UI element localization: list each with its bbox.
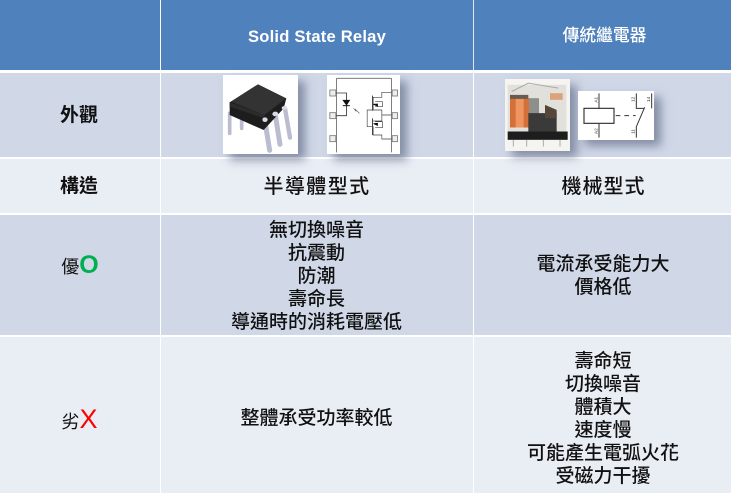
image: relay circuit diagram: 14 (646, 96, 651, 102)
image: relay circuit diagram: A1 (593, 97, 598, 103)
image: optocoupler chip (223, 75, 298, 154)
text: relay disadvantages: 受磁力干擾 (555, 466, 650, 486)
text: relay disadvantages: 切換噪音 (565, 374, 641, 394)
column divider (160, 73, 161, 493)
text: relay disadvantages: 速度慢 (574, 420, 632, 440)
text: relay disadvantages: 體積大 (574, 396, 632, 418)
label: appearance: 外觀 (60, 105, 98, 126)
image: SSR circuit diagram (327, 75, 400, 154)
text: SSR advantages (231, 220, 402, 333)
text: SSR advantages: 壽命長 (288, 289, 345, 310)
text: relay disadvantages: 壽命短 (574, 350, 632, 372)
header: traditional relay: 傳統繼電器 (563, 26, 646, 45)
row: advantages (0, 215, 731, 335)
image: relay circuit diagram: 12 (631, 96, 636, 102)
image: electromechanical relay (505, 79, 570, 151)
text: relay disadvantages (527, 350, 679, 486)
header column divider (160, 0, 161, 70)
text: SSR structure: 半導體型式 (264, 176, 370, 198)
text: SSR advantages: 抗震動 (288, 243, 345, 264)
header row (0, 0, 731, 70)
text: relay structure: 機械型式 (562, 176, 646, 198)
label: structure: 構造 (60, 176, 98, 197)
text: relay disadvantages: 可能產生電弧火花 (527, 442, 679, 464)
label: disadvantages: 劣X (61, 404, 98, 434)
text: SSR disadvantages: 整體承受功率較低 (240, 408, 392, 429)
text: SSR advantages: 防潮 (297, 266, 336, 287)
row: structure (0, 159, 731, 213)
column divider (473, 73, 474, 493)
image: relay circuit diagram: A2 (593, 128, 598, 134)
header column divider (473, 0, 474, 70)
row: appearance (0, 73, 731, 157)
image: relay circuit diagram: 11 (631, 129, 636, 134)
text: SSR advantages: 無切換噪音 (269, 220, 364, 241)
header: Solid State Relay: Solid State Relay (248, 26, 386, 46)
text: relay advantages (536, 254, 670, 298)
text: relay advantages: 價格低 (574, 277, 632, 298)
label: advantages: 優O (61, 251, 99, 279)
text: relay advantages: 電流承受能力大 (536, 254, 670, 275)
text: SSR advantages: 導通時的消耗電壓低 (231, 312, 402, 333)
row: disadvantages (0, 337, 731, 493)
image: relay circuit diagram (578, 91, 654, 140)
